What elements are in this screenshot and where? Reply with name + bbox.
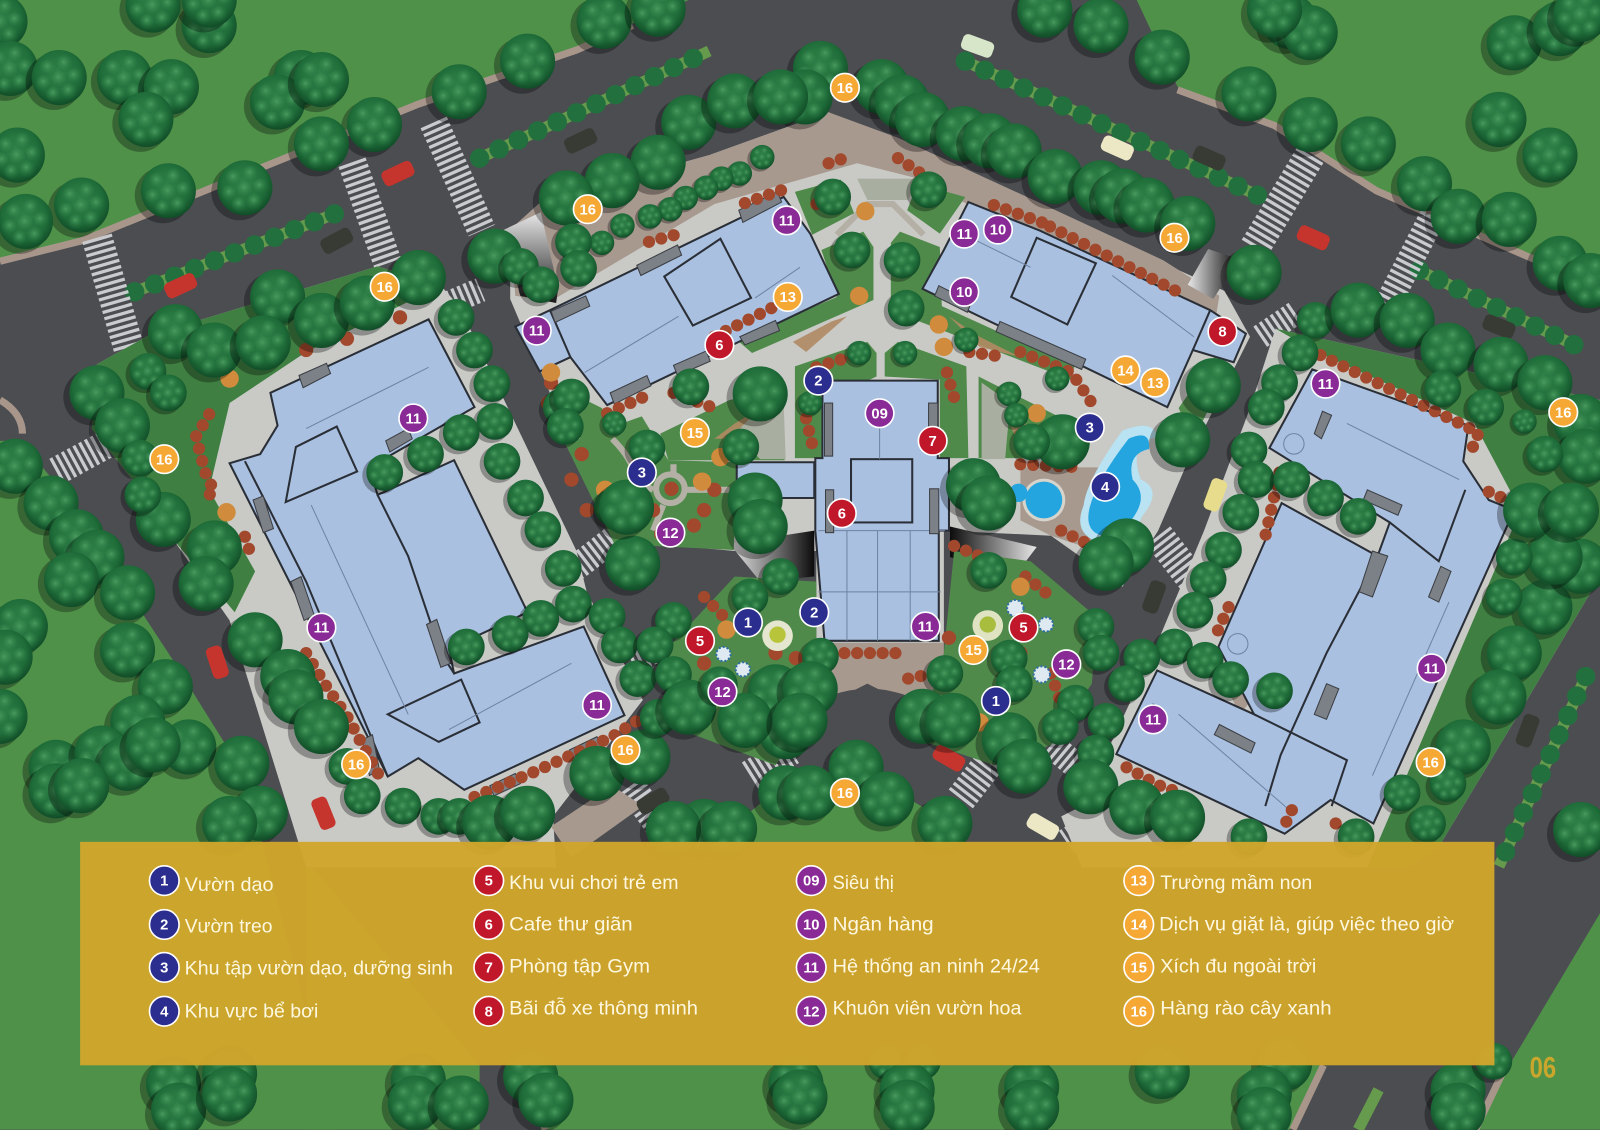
marker 10: 10 — [956, 285, 973, 301]
building: top-right wing — [922, 202, 1246, 407]
marker 11: 11 — [918, 620, 933, 636]
marker 1: 1 — [744, 616, 752, 632]
marker 1 — [982, 687, 1010, 715]
legend 2 — [149, 910, 272, 939]
marker 16 — [150, 445, 179, 473]
legend 12 — [796, 996, 1022, 1026]
play equipment — [716, 600, 1053, 683]
marker 6 — [828, 499, 856, 528]
marker 16: 16 — [837, 786, 853, 802]
legend 09: 09 — [803, 874, 819, 890]
legend 6 — [474, 910, 633, 939]
building: right block — [1116, 369, 1514, 834]
pink paving and plaza — [510, 112, 1265, 857]
marker 16 — [1549, 398, 1578, 427]
legend 5 — [474, 866, 679, 895]
marker 11 — [1139, 705, 1167, 734]
legend 4: 4 — [160, 1004, 169, 1020]
legend 16 — [1124, 996, 1332, 1026]
marker 16: 16 — [348, 757, 364, 773]
marker 11 — [911, 612, 940, 641]
marker 16 — [1416, 748, 1445, 777]
marker 11: 11 — [529, 324, 545, 340]
marker 6 — [705, 331, 734, 359]
marker 11 — [307, 613, 336, 642]
legend 11 — [796, 953, 1040, 982]
legend 14 — [1124, 910, 1454, 939]
marker 11: 11 — [314, 621, 329, 637]
marker 11: 11 — [956, 227, 972, 243]
marker 09 — [865, 399, 894, 428]
legend 13: Trường mầm non — [1160, 872, 1312, 894]
legend 1: 1 — [160, 874, 168, 890]
legend 14: 14 — [1131, 918, 1148, 934]
crosswalks — [56, 122, 1433, 842]
brown shrubs rows — [196, 157, 1514, 837]
garden paths and decking — [612, 204, 923, 531]
legend 10 — [796, 910, 934, 939]
marker 11 — [772, 206, 801, 235]
marker 6: 6 — [838, 506, 846, 522]
legend 3: Khu tập vườn dạo, dưỡng sinh — [185, 957, 453, 979]
marker 11: 11 — [1145, 712, 1161, 728]
legend 5: 5 — [485, 874, 493, 890]
marker 11: 11 — [1424, 661, 1439, 677]
marker 15: 15 — [687, 426, 703, 442]
legend 12: 12 — [803, 1004, 819, 1020]
legend 4 — [149, 996, 318, 1026]
legend column 3 — [796, 866, 1040, 1026]
map markers — [150, 73, 1578, 807]
marker 16: 16 — [1166, 231, 1183, 247]
cars — [162, 33, 1541, 842]
marker 2: 2 — [810, 605, 818, 621]
marker 11 — [1417, 654, 1446, 683]
marker 16 — [831, 779, 859, 807]
ramps — [502, 212, 1239, 582]
legend 13 — [1124, 866, 1312, 895]
marker 11 — [1311, 369, 1340, 398]
marker 10 — [984, 215, 1012, 244]
page number: 06 — [1530, 1052, 1556, 1085]
marker 5: 5 — [1019, 621, 1028, 637]
marker 13 — [1141, 368, 1169, 397]
legend panel — [80, 842, 1494, 1065]
marker 09: 09 — [871, 406, 888, 422]
legend 10: Ngân hàng — [833, 914, 934, 936]
legend 16: Hàng rào cây xanh — [1160, 997, 1332, 1019]
legend 6: Cafe thư giãn — [509, 914, 633, 936]
building: left block — [230, 319, 624, 796]
legend 09 — [796, 866, 894, 895]
legend 6: 6 — [485, 918, 493, 934]
road arc under plaza — [796, 689, 944, 735]
legend 1 — [149, 866, 273, 896]
legend 11: Hệ thống an ninh 24/24 — [833, 955, 1040, 977]
marker 5 — [1009, 613, 1038, 642]
round shrubs — [217, 202, 1046, 732]
legend 15 — [1124, 953, 1316, 982]
legend 7: Phòng tập Gym — [509, 955, 650, 977]
legend 2: Vườn treo — [185, 916, 272, 938]
site paving — [92, 112, 1600, 867]
marker 15 — [959, 636, 988, 664]
marker 3: 3 — [1086, 421, 1094, 437]
landscape green belts — [92, 266, 1600, 867]
marker 14 — [1111, 356, 1140, 385]
marker 11: 11 — [405, 411, 421, 427]
marker 12 — [708, 678, 737, 706]
legend 8: Bãi đỗ xe thông minh — [509, 996, 698, 1019]
marker 1 — [734, 608, 762, 637]
legend 15: Xích đu ngoài trời — [1160, 955, 1316, 977]
marker 16 — [573, 195, 602, 223]
marker 12: 12 — [662, 526, 679, 542]
marker 15: 15 — [965, 643, 982, 659]
marker 11 — [399, 404, 428, 433]
marker 8 — [1208, 317, 1237, 346]
marker 2 — [800, 598, 829, 627]
legend 7: 7 — [485, 960, 493, 976]
marker 10: 10 — [990, 223, 1006, 239]
legend 3: 3 — [160, 960, 168, 976]
marker 3 — [1076, 413, 1104, 442]
legend column 2 — [474, 866, 698, 1026]
legend 4: Khu vực bể bơi — [185, 1000, 318, 1022]
legend 13: 13 — [1131, 874, 1147, 890]
legend 2: 2 — [160, 918, 168, 934]
marker 16: 16 — [1555, 405, 1571, 421]
legend 5: Khu vui chơi trẻ em — [509, 872, 679, 894]
marker 16 — [611, 736, 640, 764]
legend 8: 8 — [485, 1004, 493, 1020]
legend 14: Dịch vụ giặt là, giúp việc theo giờ — [1159, 914, 1454, 936]
marker 5 — [686, 627, 714, 655]
marker 16 — [831, 73, 859, 102]
marker 7: 7 — [929, 434, 937, 450]
marker 7 — [918, 427, 947, 455]
legend 1: Vườn dạo — [185, 874, 273, 896]
marker 1: 1 — [992, 694, 1000, 710]
buildings — [230, 192, 1514, 834]
terrace stone — [735, 179, 1010, 459]
marker 12: 12 — [1058, 657, 1075, 673]
legend 15: 15 — [1131, 960, 1147, 976]
marker 16 — [370, 272, 399, 301]
marker 13 — [773, 283, 802, 311]
marker 11 — [950, 219, 979, 248]
marker 10 — [950, 278, 979, 306]
marker 16: 16 — [580, 202, 596, 218]
marker 11: 11 — [779, 214, 795, 230]
marker 16: 16 — [1422, 755, 1439, 771]
marker 4 — [1091, 472, 1119, 501]
marker 11: 11 — [589, 698, 605, 714]
marker 2 — [804, 366, 833, 395]
marker 12 — [656, 518, 685, 547]
marker 11: 11 — [1318, 377, 1333, 393]
legend column 1 — [149, 866, 453, 1026]
legend 09: Siêu thị — [833, 872, 894, 894]
marker 8: 8 — [1218, 325, 1227, 341]
legend column 4 — [1124, 866, 1454, 1026]
building: top-left wing — [515, 192, 839, 405]
legend 10: 10 — [803, 918, 819, 934]
legend 7 — [474, 953, 650, 982]
marker 11 — [583, 691, 611, 719]
marker 6: 6 — [715, 338, 724, 354]
marker 13: 13 — [780, 290, 796, 306]
marker 16 — [1160, 223, 1189, 252]
legend 12: Khuôn viên vườn hoa — [833, 997, 1022, 1019]
legend 3 — [149, 953, 453, 982]
garden beds — [565, 180, 1230, 765]
marker 16: 16 — [156, 452, 173, 468]
marker 16 — [342, 750, 370, 779]
trees below legend — [140, 1036, 1512, 1130]
marker 13: 13 — [1147, 376, 1163, 392]
swimming pool — [1009, 426, 1157, 543]
trees — [0, 0, 1600, 862]
building: central block — [737, 381, 949, 641]
marker 16: 16 — [376, 280, 393, 296]
marker 3: 3 — [638, 466, 646, 482]
legend 8 — [474, 996, 698, 1026]
marker 5: 5 — [696, 634, 704, 650]
legend 16: 16 — [1131, 1004, 1147, 1020]
marker 15 — [681, 418, 709, 447]
marker 16: 16 — [617, 743, 634, 759]
marker 16: 16 — [837, 81, 853, 97]
marker 11 — [522, 316, 551, 345]
marker 12 — [1052, 650, 1081, 679]
marker 4: 4 — [1101, 480, 1110, 496]
marker 12: 12 — [714, 685, 731, 701]
marker 2: 2 — [814, 374, 822, 390]
marker 14: 14 — [1117, 364, 1135, 380]
marker 3 — [628, 458, 656, 487]
legend 11: 11 — [803, 960, 819, 976]
